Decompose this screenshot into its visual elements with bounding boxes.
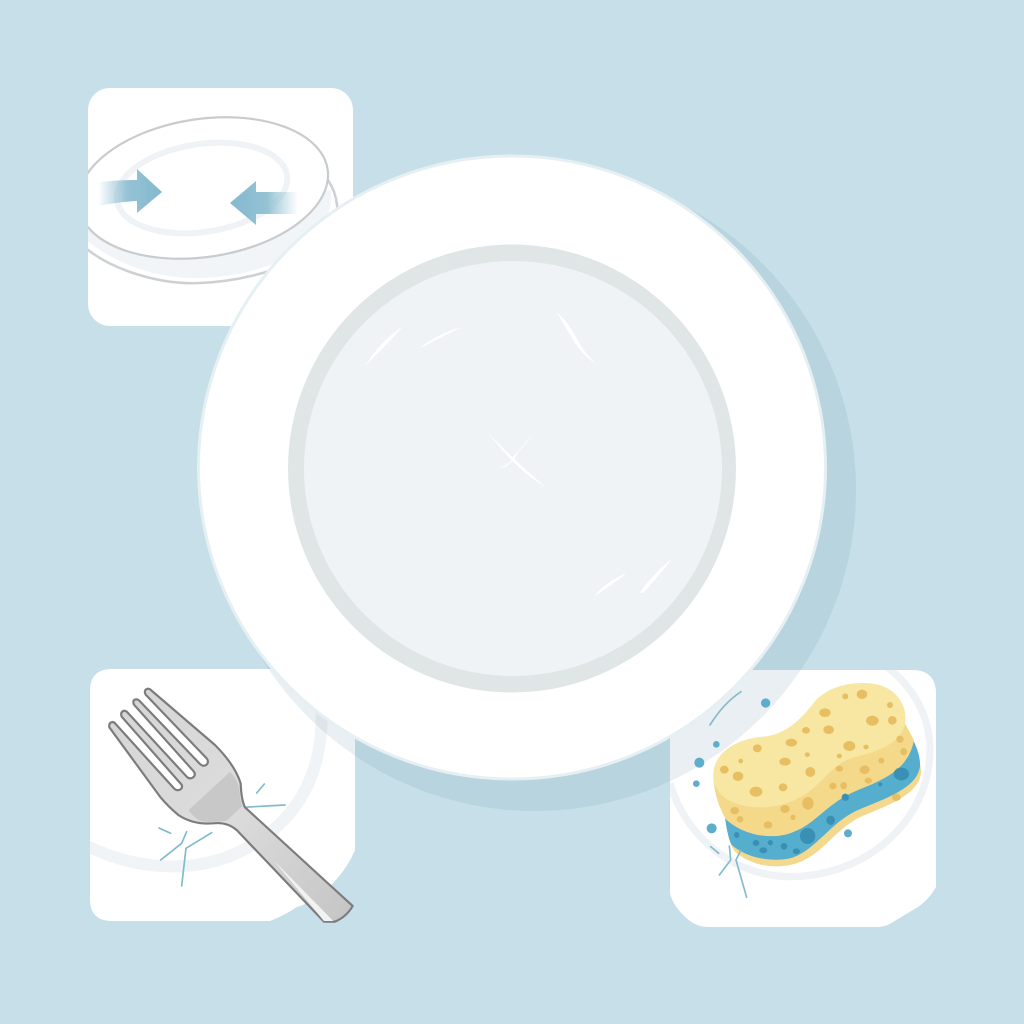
plate well — [304, 261, 722, 676]
fork palm shading — [189, 772, 242, 822]
icon: sponge — [713, 683, 921, 866]
panel: fork scratching a plate — [90, 669, 355, 923]
panel: stacked plates pressed together — [68, 88, 353, 326]
sponge top face — [713, 683, 905, 807]
surface scratches — [365, 313, 673, 597]
plate well ring — [288, 244, 736, 692]
fork handle highlight — [273, 860, 333, 921]
main plate — [198, 156, 826, 779]
plate ring behind the sponge — [670, 667, 930, 877]
plate shadow falling on the card — [670, 670, 800, 781]
water droplets — [693, 698, 852, 837]
sponge blue layer — [725, 738, 920, 860]
sponge pores — [720, 690, 907, 829]
icon: fork — [109, 689, 353, 922]
sponge bottom yellow layer — [728, 755, 921, 866]
plate shadow falling on the card — [268, 669, 355, 756]
scratch marks around the sponge — [710, 692, 747, 897]
scratch marks — [159, 784, 285, 886]
main plate drop shadow — [214, 169, 856, 811]
panel: abrasive sponge on a plate — [670, 670, 936, 927]
plate rim — [198, 156, 826, 779]
arrow: pressing right — [98, 169, 162, 213]
arrow: pressing left — [230, 181, 298, 225]
sponge side yellow layer — [713, 723, 914, 836]
illustration canvas — [88, 88, 936, 927]
plate ring behind the fork — [87, 710, 322, 866]
stacked plate pair — [88, 116, 338, 284]
